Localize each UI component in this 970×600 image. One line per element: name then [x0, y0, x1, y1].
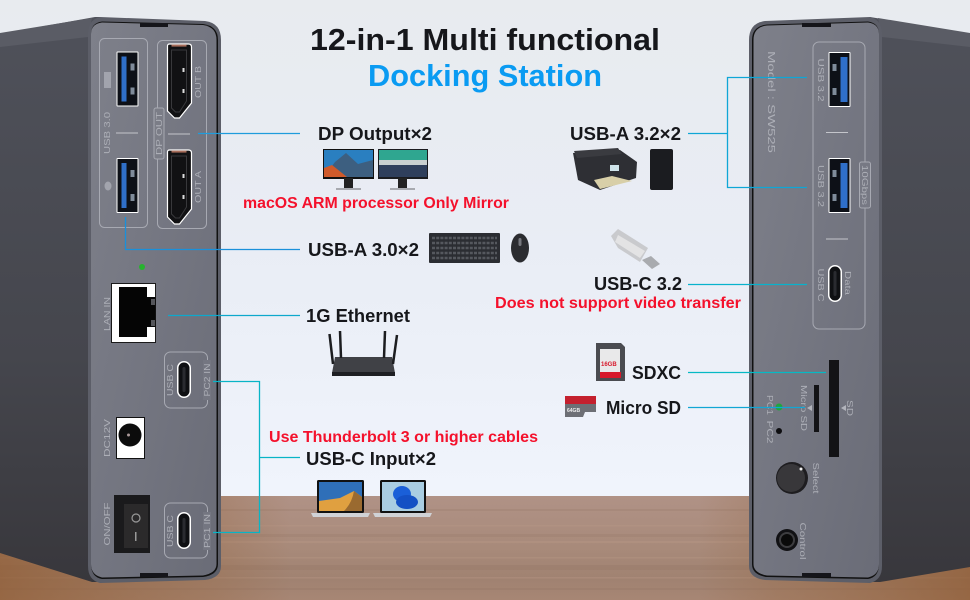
model label: Model : SW525	[765, 51, 776, 154]
USB-C input heading: USB-C Input×2	[306, 449, 436, 469]
USB ports group: USB 3.2	[816, 165, 826, 207]
warning: Thunderbolt: Use Thunderbolt 3 or higher cables	[269, 429, 538, 446]
connector lines	[126, 78, 826, 532]
USB-C 3.2 heading: USB-C 3.2	[594, 274, 682, 294]
left device: dock rear panel	[0, 17, 221, 583]
DC power jack: DC12V	[102, 419, 112, 457]
LED	[139, 264, 145, 270]
SD slot	[829, 360, 855, 457]
right device: dock front panel	[749, 17, 970, 583]
power switch	[102, 495, 150, 553]
USB ports group: USB 3.2	[816, 58, 826, 102]
title: Docking Station	[368, 58, 602, 93]
USB ports group	[813, 42, 870, 329]
top and bottom notches	[802, 23, 831, 577]
title	[310, 22, 660, 93]
USB 3.0 group	[100, 38, 148, 228]
USB-C PC2 IN: PC2 IN	[202, 364, 212, 396]
SDXC heading: SDXC	[632, 363, 681, 383]
DP OUT group: OUT A	[193, 171, 203, 203]
USB ports group: USB C	[816, 268, 826, 302]
icon: mouse	[511, 234, 529, 262]
USB ports group: Data	[843, 271, 853, 295]
panel body	[88, 17, 221, 583]
top and bottom notches	[140, 23, 168, 577]
PC indicator LEDs	[765, 395, 782, 444]
icon: router	[330, 331, 397, 376]
control jack	[776, 522, 808, 560]
USB ports group: 10Gbps	[860, 165, 870, 205]
USB-C PC2 IN	[164, 352, 212, 408]
warning: macOS: macOS ARM processor Only Mirror	[243, 195, 509, 212]
icon: printer	[573, 148, 637, 190]
icon: USB flash drive	[611, 229, 660, 269]
icon: SD card	[596, 343, 625, 381]
DP OUT group: OUT B	[193, 66, 203, 98]
PC indicator LEDs: PC1	[765, 395, 775, 415]
Ethernet port: LAN IN	[102, 297, 112, 331]
icon: two monitors	[323, 149, 428, 190]
wooden table	[0, 496, 970, 600]
USB-A 3.0 heading: USB-A 3.0×2	[308, 240, 419, 260]
Ethernet heading: 1G Ethernet	[306, 306, 410, 326]
USB 3.0 group: USB 3.0	[102, 112, 112, 154]
icon: SD card: 16GB	[601, 362, 617, 368]
icon: keyboard	[429, 233, 500, 263]
USB-C PC1 IN	[164, 503, 212, 558]
icon: external drive	[650, 149, 673, 190]
Ethernet port	[102, 284, 156, 342]
PC indicator LEDs: PC2	[765, 420, 775, 444]
warning: video: Does not support video transfer	[495, 295, 741, 312]
control jack: Control	[798, 522, 808, 560]
USB-C PC1 IN: USB C	[165, 515, 175, 547]
DP OUT group: DP OUT	[154, 112, 164, 155]
micro SD slot: Micro SD	[799, 385, 809, 431]
USB-C PC1 IN: PC1 IN	[202, 514, 212, 548]
micro SD slot	[799, 385, 819, 432]
Micro SD heading: Micro SD	[606, 398, 681, 418]
icon: laptops	[311, 480, 432, 517]
USB-C PC2 IN: USB C	[165, 364, 175, 396]
DC power jack	[102, 418, 144, 458]
select button: Select	[811, 462, 821, 494]
icon: micro SD card	[565, 396, 596, 417]
device side	[0, 17, 100, 582]
DP OUT group	[154, 40, 206, 228]
SD slot: SD	[845, 400, 855, 416]
icon: micro SD card: 64GB	[567, 408, 580, 414]
device side	[870, 17, 970, 582]
power switch: ON/OFF	[102, 502, 112, 546]
USB-A 3.2 heading: USB-A 3.2×2	[570, 124, 681, 144]
panel body	[749, 17, 882, 583]
DP output heading: DP Output×2	[318, 124, 432, 144]
title: 12-in-1 Multi functional	[310, 22, 660, 57]
select button	[776, 462, 821, 494]
